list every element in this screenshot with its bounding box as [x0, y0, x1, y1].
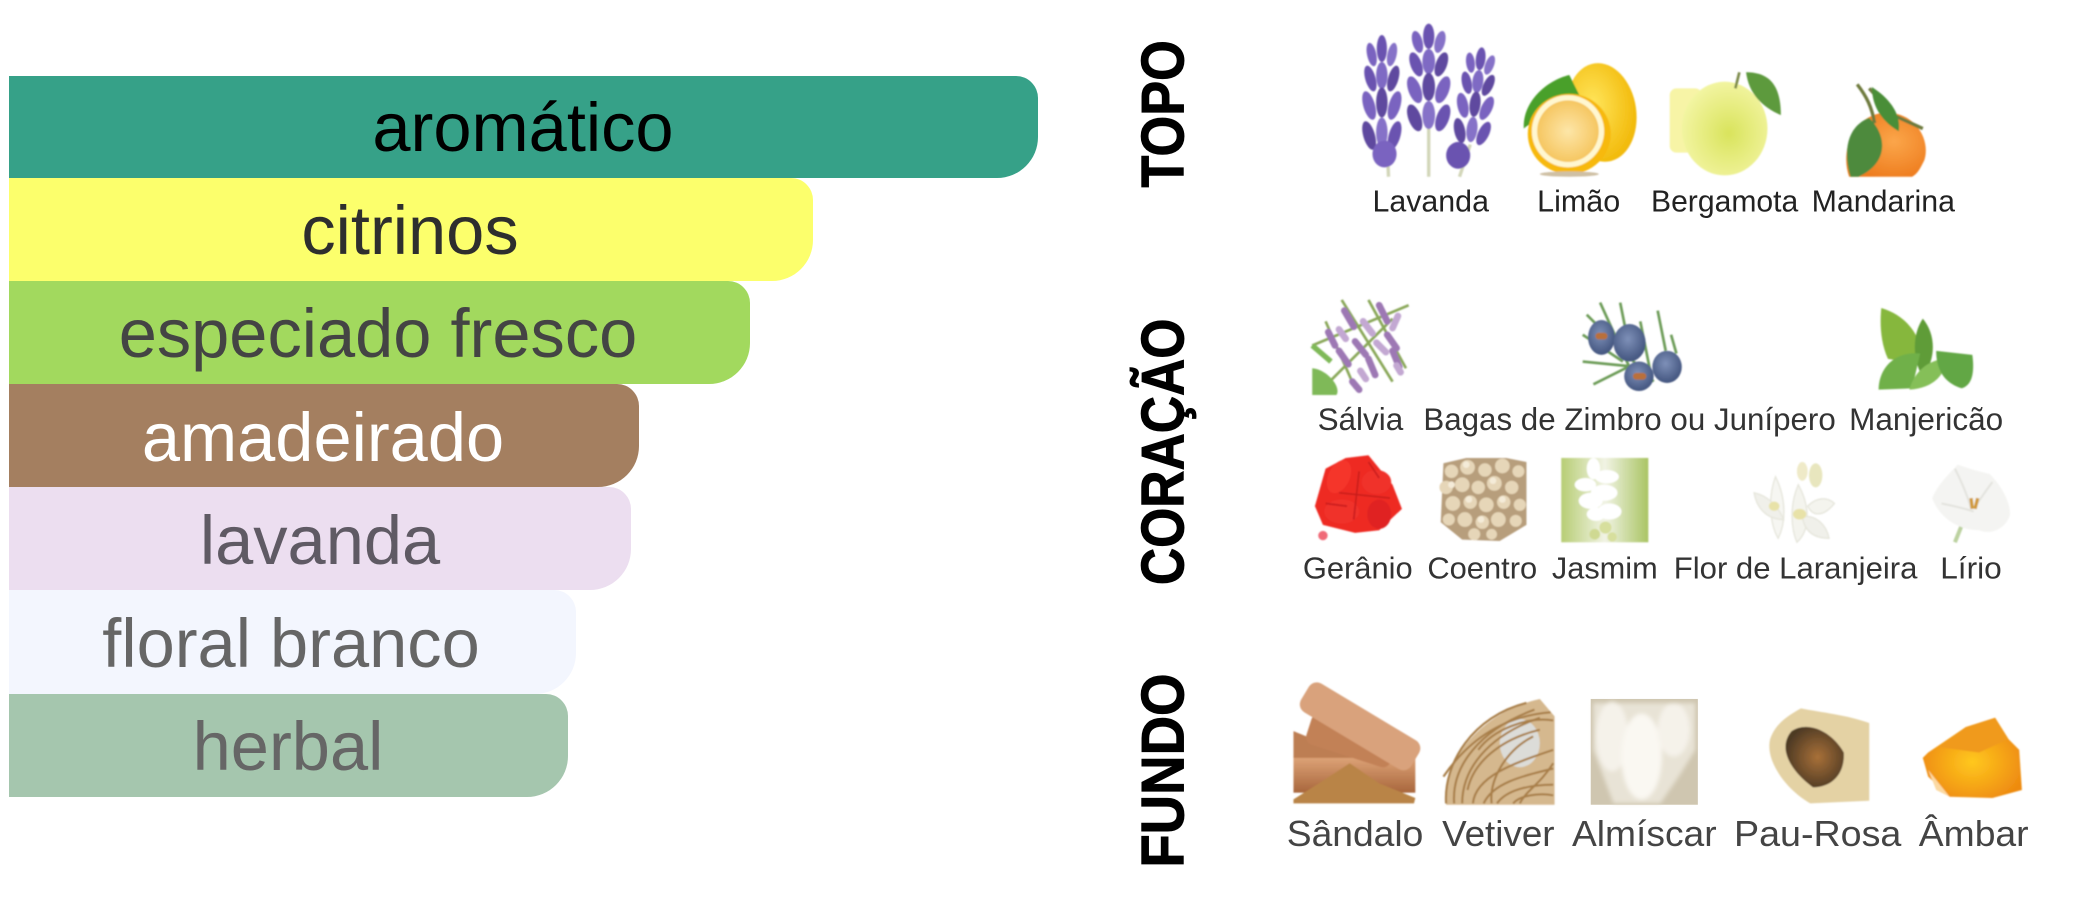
label: Manjericão: Manjericão — [1849, 402, 2003, 437]
icon: bergamota — [1670, 72, 1781, 175]
icon: mandarina — [1846, 84, 1926, 177]
bar: herbal — [9, 694, 568, 797]
icon: jasmim — [1561, 458, 1648, 542]
icon: gerânio — [1315, 455, 1402, 540]
label: Bagas de Zimbro ou Junípero: Bagas de Zimbro ou Junípero — [1423, 402, 1836, 437]
bar: aromático: aromático — [372, 89, 674, 166]
icon: pau-rosa — [1769, 708, 1869, 803]
icon: bagas de zimbro — [1583, 303, 1682, 391]
label: Jasmim: Jasmim — [1552, 550, 1658, 585]
icon: limão — [1524, 59, 1643, 177]
label: Mandarina: Mandarina — [1812, 186, 1955, 219]
label: Lírio: Lírio — [1940, 550, 2002, 585]
bar: especiado fresco: especiado fresco — [119, 295, 637, 372]
label: Flor de Laranjeira: Flor de Laranjeira — [1674, 550, 1918, 585]
heading: FUNDO: FUNDO — [1129, 674, 1197, 868]
bar: aromático — [9, 76, 1038, 178]
icon: almíscar — [1591, 699, 1698, 805]
bar: lavanda — [9, 487, 631, 590]
label: Limão: Limão — [1537, 186, 1620, 219]
icon: âmbar — [1923, 718, 2022, 798]
bar: floral branco — [9, 590, 576, 694]
bar: lavanda: lavanda — [200, 502, 441, 579]
icon: flor de laranjeira — [1754, 462, 1834, 542]
label: Âmbar: Âmbar — [1919, 813, 2029, 854]
heading: TOPO: TOPO — [1129, 40, 1197, 187]
bar: floral branco: floral branco — [102, 605, 480, 682]
icon: coentro — [1439, 458, 1526, 541]
label: Gerânio: Gerânio — [1303, 550, 1413, 585]
icon: lírio — [1932, 465, 2010, 542]
label: Sálvia: Sálvia — [1318, 402, 1404, 437]
bar chart: acordes — [9, 76, 1038, 797]
label: Bergamota: Bergamota — [1651, 186, 1798, 219]
label: Sândalo: Sândalo — [1287, 813, 1423, 854]
icon: manjericão — [1879, 308, 1973, 390]
bar: citrinos — [9, 178, 813, 281]
label: Vetiver: Vetiver — [1442, 813, 1555, 854]
label: Pau-Rosa: Pau-Rosa — [1734, 813, 1902, 854]
label: Almíscar: Almíscar — [1572, 813, 1717, 854]
heading: CORAÇÃO: CORAÇÃO — [1129, 319, 1197, 585]
icon: lavanda — [1359, 24, 1503, 177]
icon: vetiver — [1443, 699, 1555, 805]
bar: citrinos: citrinos — [301, 192, 519, 269]
bar: amadeirado — [9, 384, 639, 487]
bar: amadeirado: amadeirado — [142, 399, 504, 476]
bar: herbal: herbal — [193, 708, 383, 785]
bar: especiado fresco — [9, 281, 750, 384]
icon: sálvia — [1312, 300, 1409, 395]
notes panel — [1129, 24, 2029, 868]
icon: sândalo — [1293, 679, 1424, 803]
label: Coentro: Coentro — [1427, 550, 1537, 585]
label: Lavanda: Lavanda — [1372, 186, 1489, 219]
